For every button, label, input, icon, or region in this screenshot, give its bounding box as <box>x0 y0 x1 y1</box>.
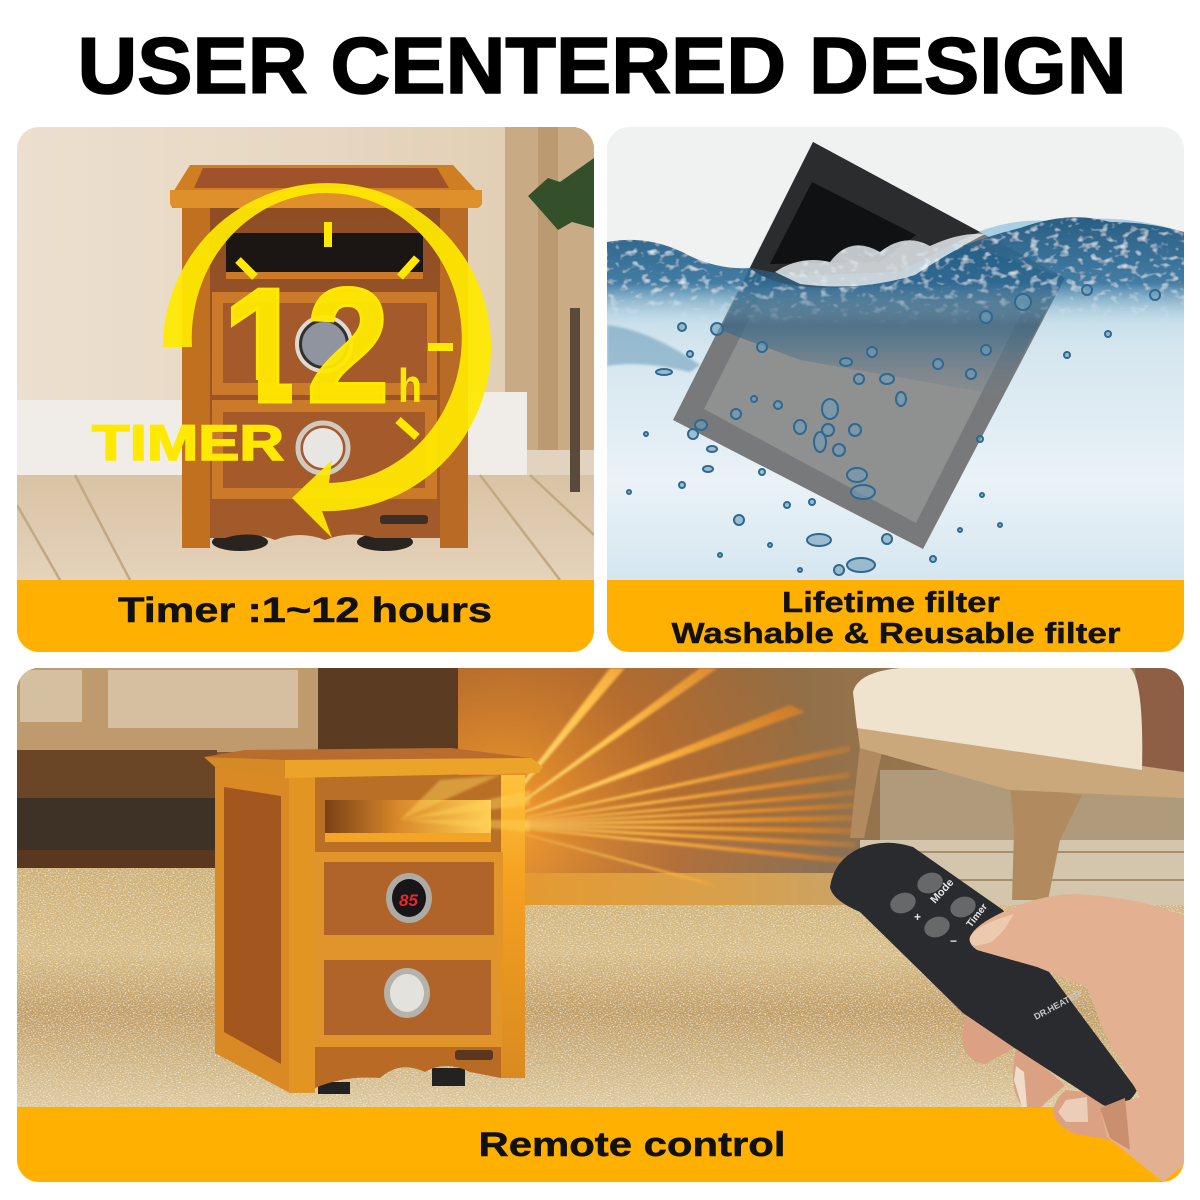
title: USER CENTERED DESIGN <box>78 21 1126 110</box>
room background <box>17 668 1184 1107</box>
heater <box>204 748 543 1094</box>
heat rays <box>458 668 860 888</box>
icon: clock arrow <box>163 183 491 538</box>
panel: remote control <box>17 668 1184 1182</box>
caption band <box>17 1107 1184 1182</box>
label: 12h: 2 <box>306 254 390 437</box>
label: 12h: 1 <box>222 254 306 437</box>
panel: filter <box>607 127 1184 652</box>
caption band: Lifetime filter <box>782 587 1000 619</box>
heater: 85 <box>399 891 418 910</box>
heater <box>170 165 482 551</box>
caption band: Washable & Reusable filter <box>672 618 1120 650</box>
icon: fingers <box>962 1010 1112 1140</box>
water background <box>607 127 1184 580</box>
icon: hand <box>970 894 1184 1182</box>
splash <box>775 234 985 287</box>
caption band: Timer :1~12 hours <box>118 591 492 630</box>
panel: timer <box>17 127 594 652</box>
icon: remote: DR.HEATER <box>1032 988 1083 1022</box>
armchair <box>850 668 1184 900</box>
water wave band <box>607 217 1184 325</box>
filter frame <box>673 142 1065 549</box>
icon: remote: + <box>914 910 921 924</box>
bubbles <box>627 285 1160 575</box>
label: 12h: h <box>398 359 422 412</box>
caption band <box>17 580 594 652</box>
ray overlay <box>400 775 530 832</box>
icon: remote: Mode <box>928 877 956 906</box>
caption band: Remote control <box>478 1126 786 1164</box>
label: 12h <box>230 286 420 404</box>
label: timer: TIMER <box>92 415 284 471</box>
clock ticks <box>238 222 453 437</box>
caption band <box>607 580 1184 652</box>
room background <box>17 127 594 652</box>
icon: remote: − <box>950 934 957 948</box>
icon: remote <box>830 843 1137 1108</box>
icon: remote: Timer <box>965 902 990 930</box>
